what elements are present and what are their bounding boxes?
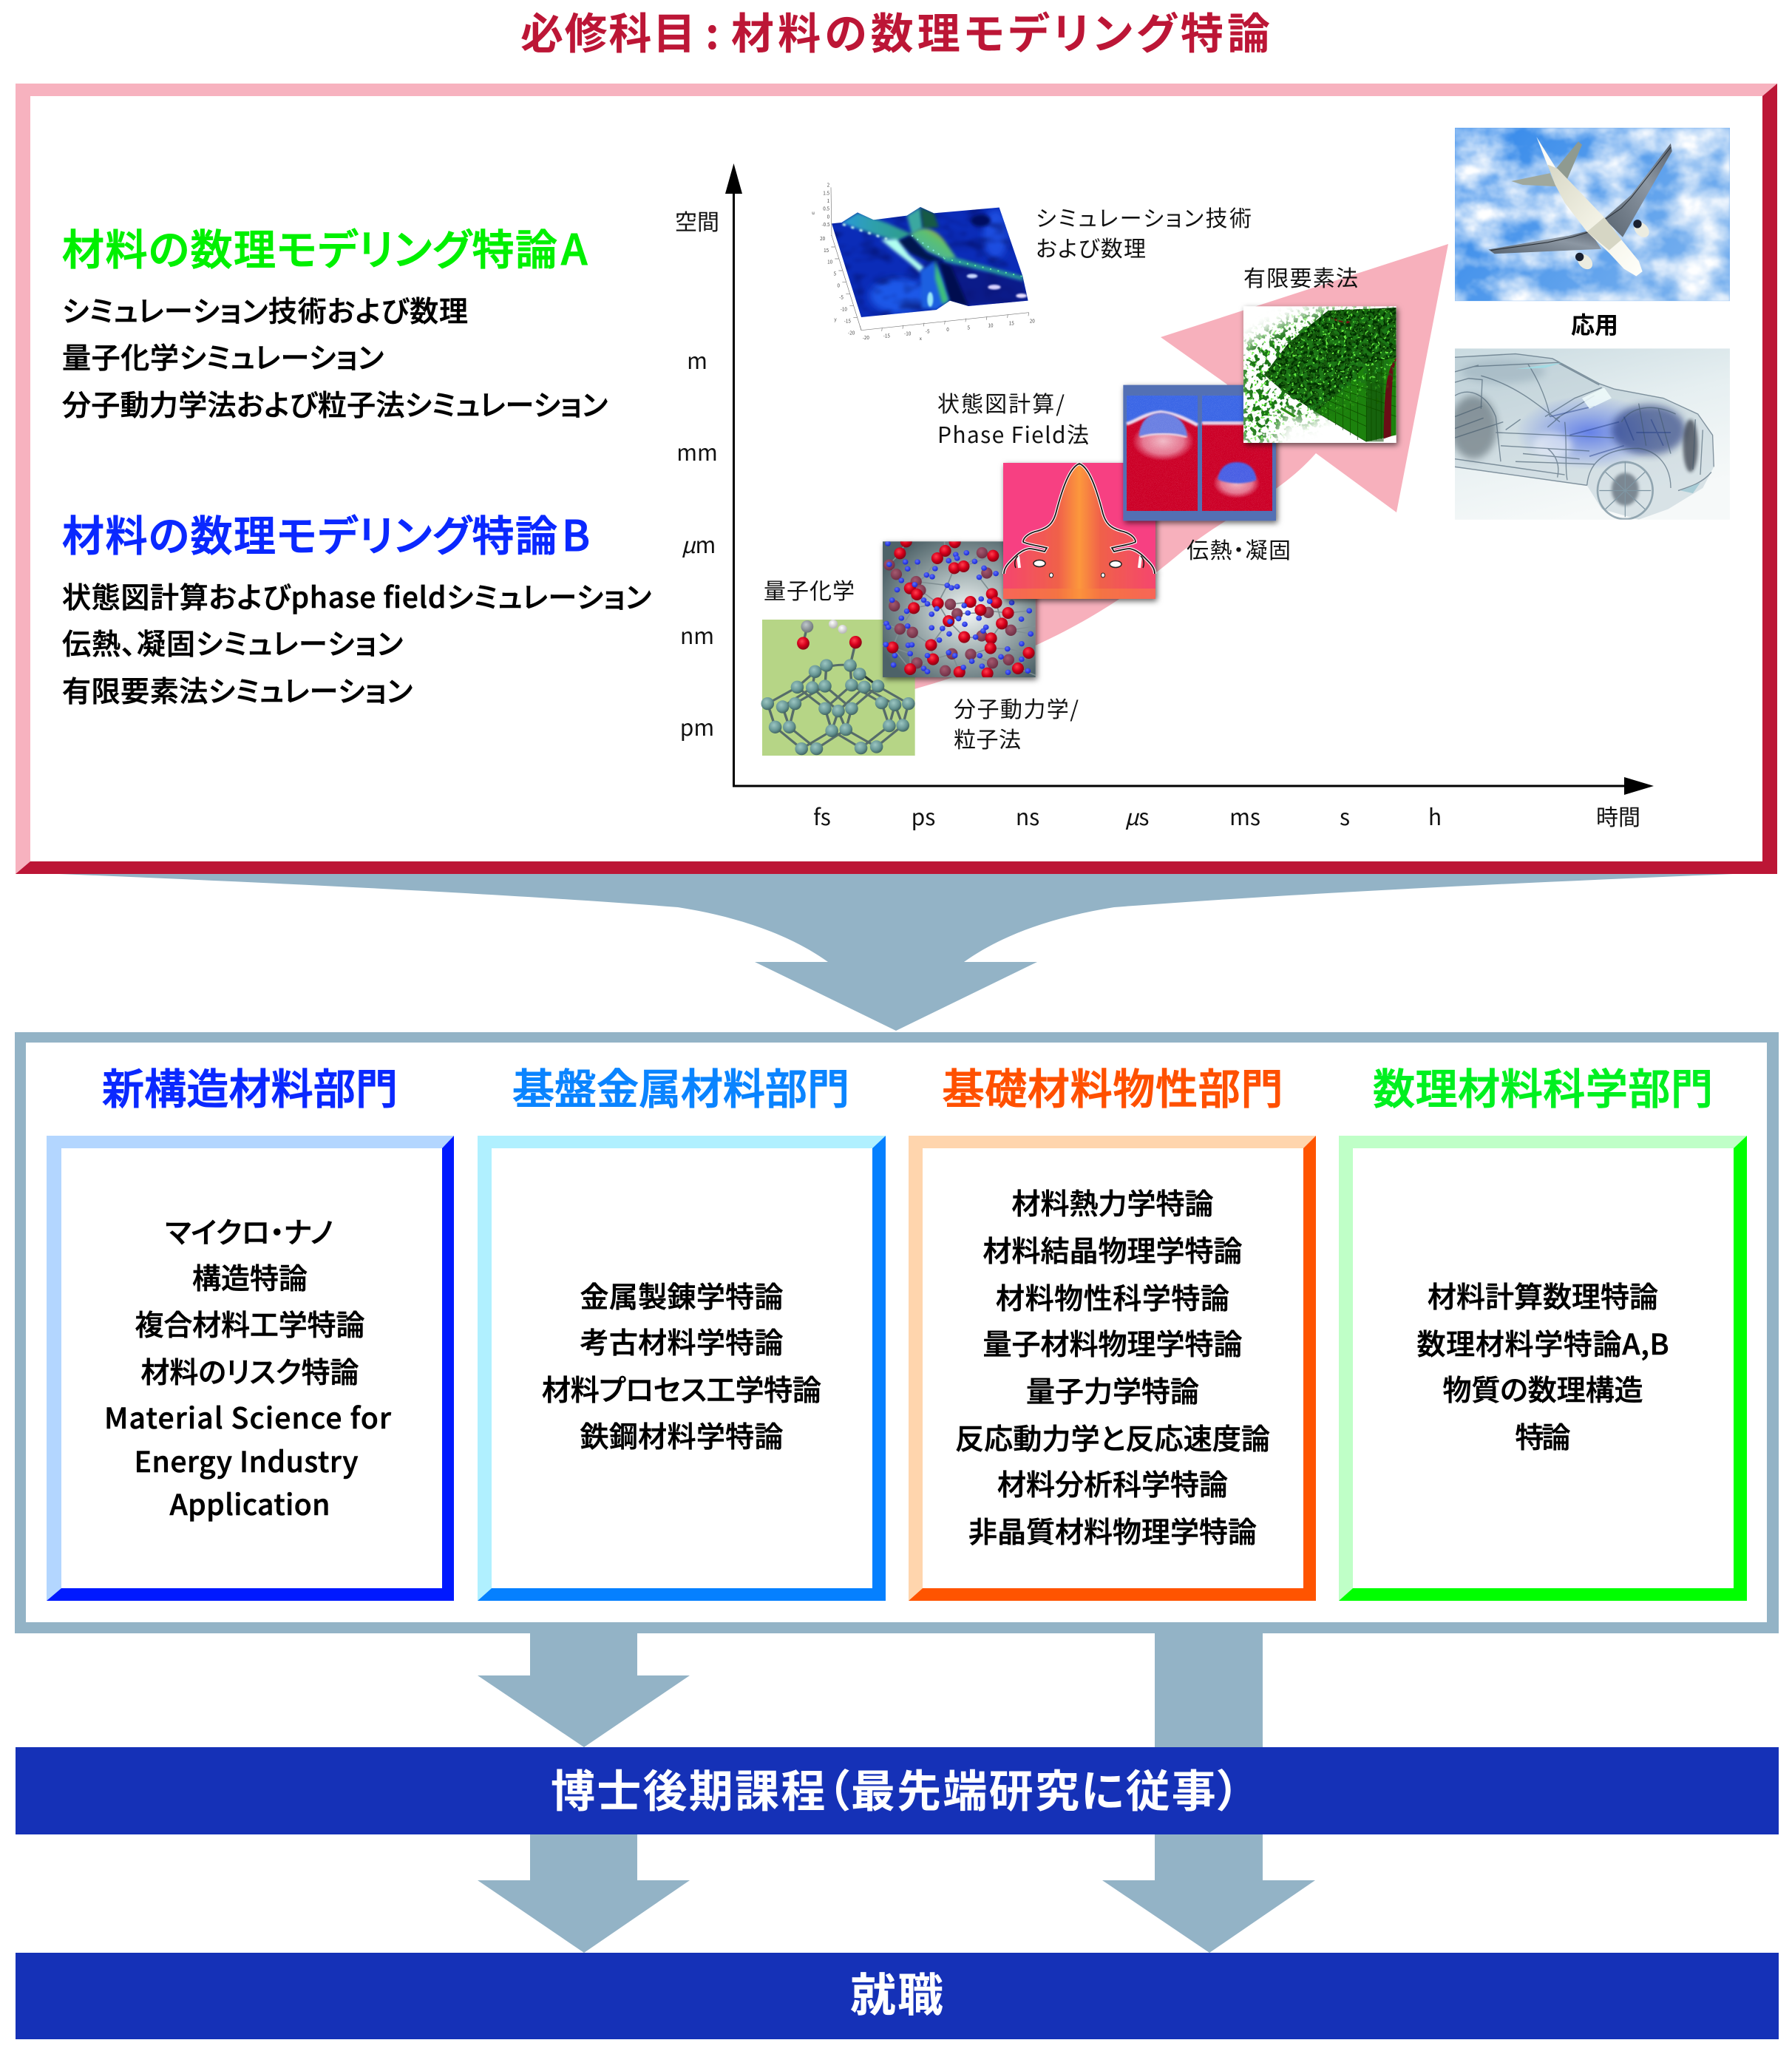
- text block: course B topics: 有限要素法シミュレーション: [62, 669, 413, 711]
- image: surface plot: 0: [838, 282, 841, 289]
- department: mathematical materials science: [1339, 1056, 1747, 1601]
- title: 必修科目: [520, 0, 696, 61]
- department: new structural materials: [47, 1056, 454, 1601]
- heading: course A: 材料の数理モデリング特論: [62, 217, 557, 277]
- image: airplane photo: [1455, 128, 1730, 301]
- image: surface plot: 1: [827, 197, 830, 204]
- image: surface plot: 20: [820, 235, 826, 242]
- image: transparent car: [1450, 348, 1730, 520]
- text block: course B topics: 状態図計算およびphase fieldシミュレーション: [62, 575, 651, 617]
- course list: 複合材料工学特論: [135, 1303, 365, 1344]
- axis labels: space: nm: [680, 618, 714, 651]
- course box frame: [47, 1136, 454, 1601]
- arrow: right, departments to doctoral course: [1155, 1633, 1263, 1747]
- department: basic metal materials: [478, 1056, 886, 1601]
- axis labels: time: ns: [1016, 799, 1039, 832]
- course list: 材料のリスク特論: [140, 1350, 359, 1392]
- image: surface plot: -5: [839, 294, 844, 300]
- image: surface plot: 5: [968, 324, 971, 331]
- image: surface plot: 0: [827, 214, 830, 220]
- image: surface plot: 1.5: [823, 189, 830, 196]
- course list: [104, 1210, 392, 1524]
- heading: course A: A: [561, 217, 588, 277]
- heading: 新構造材料部門: [102, 1056, 398, 1116]
- axis labels: space: [675, 204, 719, 742]
- course list: 材料熱力学特論: [1011, 1182, 1214, 1223]
- course list: 材料物性科学特論: [996, 1276, 1229, 1318]
- image: surface plot: -10: [841, 305, 847, 312]
- course list: 材料分析科学特論: [997, 1463, 1228, 1504]
- axis labels: time: ms: [1229, 799, 1260, 832]
- image: surface plot: -5: [926, 328, 930, 335]
- course box frame: [909, 1136, 1316, 1601]
- heading: course B: B: [562, 503, 590, 563]
- image: surface plot: -15: [883, 333, 890, 339]
- text block: course B topics: 伝熱、凝固シミュレーション: [62, 622, 403, 663]
- text: molecular dynamics label: 分子動力学/: [954, 691, 1079, 724]
- image: surface plot: 0: [946, 326, 949, 333]
- course list: マイクロ・ナノ: [166, 1210, 333, 1252]
- course list: Application: [170, 1482, 330, 1524]
- text: simulation label: および数理: [1036, 231, 1146, 263]
- text: phase diagram label: [937, 386, 1089, 450]
- text: simulation label: シミュレーション技術: [1036, 200, 1252, 233]
- image: finite element simulation: [1243, 306, 1396, 443]
- arrow: left, departments to doctoral course: [478, 1633, 690, 1747]
- course list: 考古材料学特論: [580, 1321, 784, 1362]
- axis labels: time: s: [1340, 799, 1350, 832]
- heading: 基礎材料物性部門: [942, 1056, 1283, 1116]
- text block: course A topics: シミュレーション技術および数理: [62, 289, 468, 331]
- text: heat transfer label: 伝熱・凝固: [1187, 532, 1291, 565]
- course list: 鉄鋼材料学特論: [580, 1414, 784, 1456]
- axis labels: space: pm: [680, 710, 714, 742]
- axis labels: time: h: [1428, 799, 1442, 832]
- heading: 数理材料科学部門: [1373, 1056, 1713, 1116]
- axis labels: time: 時間: [1596, 799, 1640, 832]
- axis labels: time: μs: [1125, 799, 1149, 832]
- axis labels: space: 空間: [675, 204, 719, 237]
- course list: [542, 1275, 821, 1456]
- heading: course B: 材料の数理モデリング特論: [62, 503, 557, 563]
- axis labels: time: fs: [813, 799, 831, 832]
- course box frame: [478, 1136, 886, 1601]
- title: :: [705, 0, 719, 61]
- course list: Material Science for: [104, 1396, 392, 1437]
- text: applications label: 応用: [1571, 307, 1618, 341]
- arrow: right, doctoral course to employment: [1102, 1834, 1315, 1953]
- text block: course B topics: [62, 575, 651, 711]
- image: surface plot: -20: [863, 334, 869, 341]
- image: surface plot: 10: [988, 322, 994, 328]
- axis labels: time: [813, 799, 1640, 832]
- course list: 物質の数理構造: [1443, 1368, 1643, 1409]
- image: surface plot: -15: [844, 317, 851, 324]
- image: surface plot: -10: [904, 331, 912, 337]
- image: heat transfer and solidification: [1123, 385, 1276, 521]
- image: surface plot: -0.5: [821, 221, 830, 228]
- arrow: pink scale-up arrow: [887, 244, 1448, 689]
- course list: Energy Industry: [135, 1440, 358, 1481]
- course list: 数理材料学特論A,B: [1416, 1322, 1669, 1363]
- department: basic material properties: [909, 1056, 1316, 1601]
- image: quantum chemistry molecule: [761, 620, 915, 756]
- course list: 量子材料物理学特論: [983, 1322, 1242, 1363]
- axis labels: space: m: [687, 343, 707, 376]
- text: phase diagram label: Phase Field法: [937, 417, 1089, 450]
- image: surface plot: 15: [1009, 320, 1014, 327]
- text: FEM label: 有限要素法: [1243, 260, 1358, 293]
- panel: departments frame: [15, 1032, 1779, 1633]
- text: phase diagram label: 状態図計算/: [937, 386, 1065, 418]
- text: quantum chemistry label: 量子化学: [764, 573, 855, 606]
- banner: employment: [16, 1953, 1779, 2039]
- image: surface plot: 10: [827, 259, 833, 265]
- image: phase field dendrite: [1003, 463, 1155, 599]
- image: surface plot: [812, 182, 1035, 342]
- text block: course A topics: 量子化学シミュレーション: [62, 336, 384, 377]
- course list: 材料プロセス工学特論: [542, 1368, 821, 1409]
- course list: 量子力学特論: [1026, 1369, 1199, 1411]
- course list: [1416, 1275, 1669, 1457]
- course box frame: [1339, 1136, 1747, 1601]
- image: surface plot: 5: [834, 271, 837, 277]
- text block: course A topics: 分子動力学法および粒子法シミュレーション: [62, 383, 608, 424]
- text: molecular dynamics label: 粒子法: [954, 722, 1021, 754]
- axis labels: time: ps: [912, 799, 935, 832]
- course list: 材料結晶物理学特論: [983, 1229, 1242, 1270]
- course list: 反応動力学と反応速度論: [955, 1417, 1270, 1458]
- image: surface plot: 0.5: [823, 206, 830, 212]
- image: surface plot: y: [834, 316, 837, 322]
- course list: 金属製錬学特論: [580, 1275, 784, 1316]
- course list: 構造特論: [192, 1256, 308, 1298]
- banner: doctoral course: 博士後期課程（最先端研究に従事）: [551, 1756, 1240, 1820]
- banner: doctoral course: [16, 1747, 1779, 1834]
- heading: 基盤金属材料部門: [512, 1056, 849, 1116]
- panel: required course frame: [16, 84, 1777, 874]
- image: surface plot: 15: [824, 247, 829, 254]
- arrow: large funnel arrow to departments: [59, 874, 1733, 1031]
- image: surface plot: 2: [827, 182, 830, 189]
- title: 材料の数理モデリング特論: [731, 0, 1270, 61]
- image: molecular dynamics particles: [883, 535, 1036, 680]
- course list: 非晶質材料物理学特論: [968, 1510, 1257, 1551]
- text: simulation label: [1036, 200, 1252, 263]
- arrow: left, doctoral course to employment: [478, 1834, 690, 1953]
- text: molecular dynamics label: [954, 691, 1079, 754]
- course list: [955, 1182, 1270, 1551]
- axis labels: space: μm: [682, 527, 716, 560]
- course list: 材料計算数理特論: [1428, 1275, 1658, 1316]
- image: surface plot: u: [812, 209, 815, 216]
- text block: course A topics: [62, 289, 608, 424]
- banner: employment: 就職: [850, 1958, 943, 2024]
- chart: space-time scale axes: [725, 163, 1654, 795]
- axis labels: space: mm: [676, 435, 718, 467]
- course list: 特論: [1516, 1415, 1570, 1457]
- image: surface plot: -20: [848, 329, 855, 336]
- image: surface plot: x: [920, 335, 923, 342]
- image: surface plot: 20: [1030, 318, 1035, 325]
- plane: [1488, 137, 1672, 277]
